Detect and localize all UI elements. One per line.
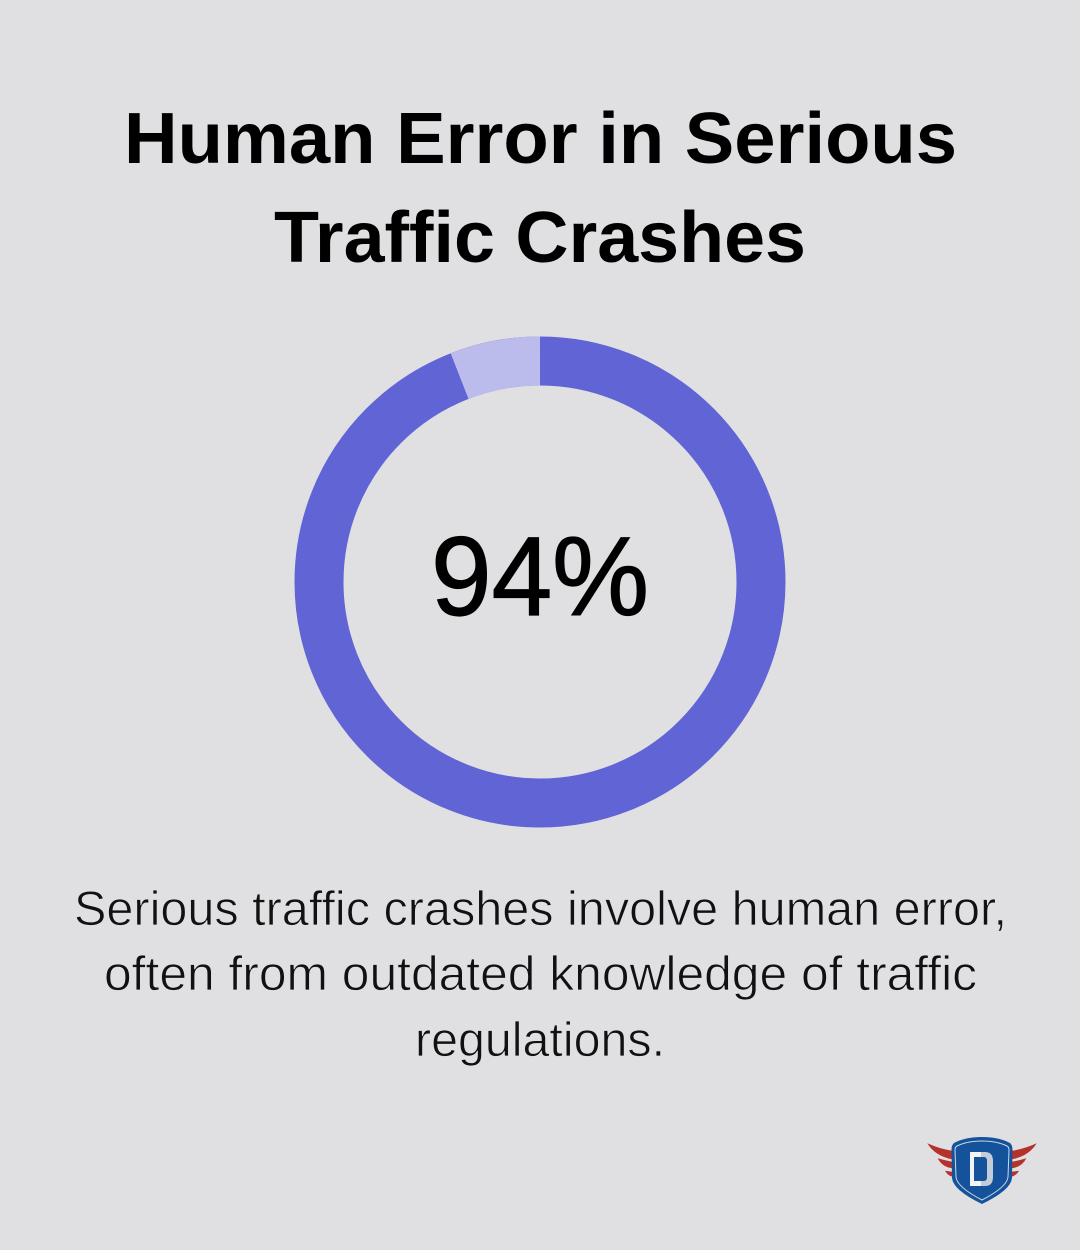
description text: often from outdated knowledge of traffic	[104, 948, 977, 1001]
title: Human Error in Serious	[124, 99, 957, 179]
donut value: 94%	[431, 514, 649, 639]
icon: winged shield logo	[927, 1137, 1037, 1204]
title: Traffic Crashes	[274, 198, 806, 278]
description text: Serious traffic crashes involve human error,	[74, 883, 1007, 936]
description text: regulations.	[415, 1014, 665, 1067]
description text	[74, 883, 1007, 1067]
title	[124, 99, 957, 278]
donut chart: 94%	[319, 361, 761, 803]
